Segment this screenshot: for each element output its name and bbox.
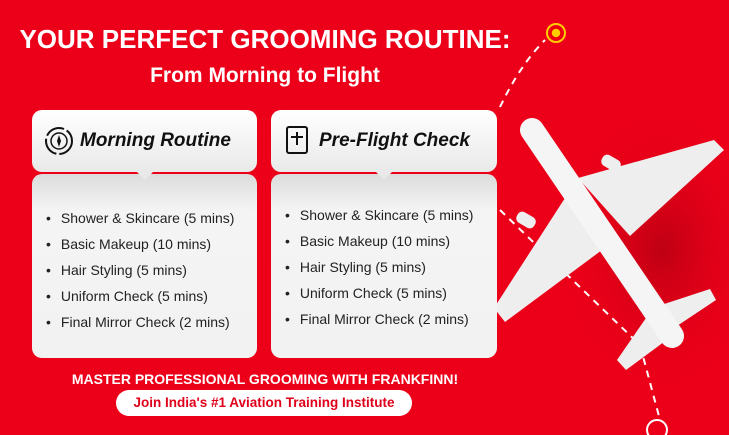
button: Join India's #1 Aviation Training Institute	[134, 395, 394, 410]
panel: pre-flight header: Pre-Flight Check	[319, 130, 470, 151]
panel: morning routine list: Uniform Check (5 mins)	[61, 288, 208, 304]
panel: morning routine list: Basic Makeup (10 mins)	[61, 236, 211, 252]
icon: tablet plane	[286, 126, 308, 154]
panel: morning routine header: Morning Routine	[80, 130, 231, 151]
button	[116, 390, 412, 416]
panel: pre-flight header	[271, 110, 497, 172]
panel: morning routine list: Hair Styling (5 mins)	[61, 262, 187, 278]
panel: pre-flight list: Final Mirror Check (2 mins)	[300, 311, 469, 327]
panel: morning routine list: Final Mirror Check (2 mins)	[61, 314, 230, 330]
panel: pre-flight list: Shower & Skincare (5 mins)	[300, 207, 473, 223]
panel: pre-flight list: Hair Styling (5 mins)	[300, 259, 426, 275]
panel: pre-flight list: Basic Makeup (10 mins)	[300, 233, 450, 249]
icon: compass clock	[45, 127, 73, 155]
title: YOUR PERFECT GROOMING ROUTINE:	[19, 24, 511, 54]
panel: morning routine list	[32, 174, 257, 358]
panel: pre-flight list	[271, 174, 497, 358]
subtitle: From Morning to Flight	[150, 64, 380, 87]
panel: morning routine list: Shower & Skincare (5 mins)	[61, 210, 234, 226]
panel: morning routine header	[32, 110, 257, 172]
tagline: MASTER PROFESSIONAL GROOMING WITH FRANKFINN!	[72, 371, 458, 387]
panel: pre-flight list: Uniform Check (5 mins)	[300, 285, 447, 301]
